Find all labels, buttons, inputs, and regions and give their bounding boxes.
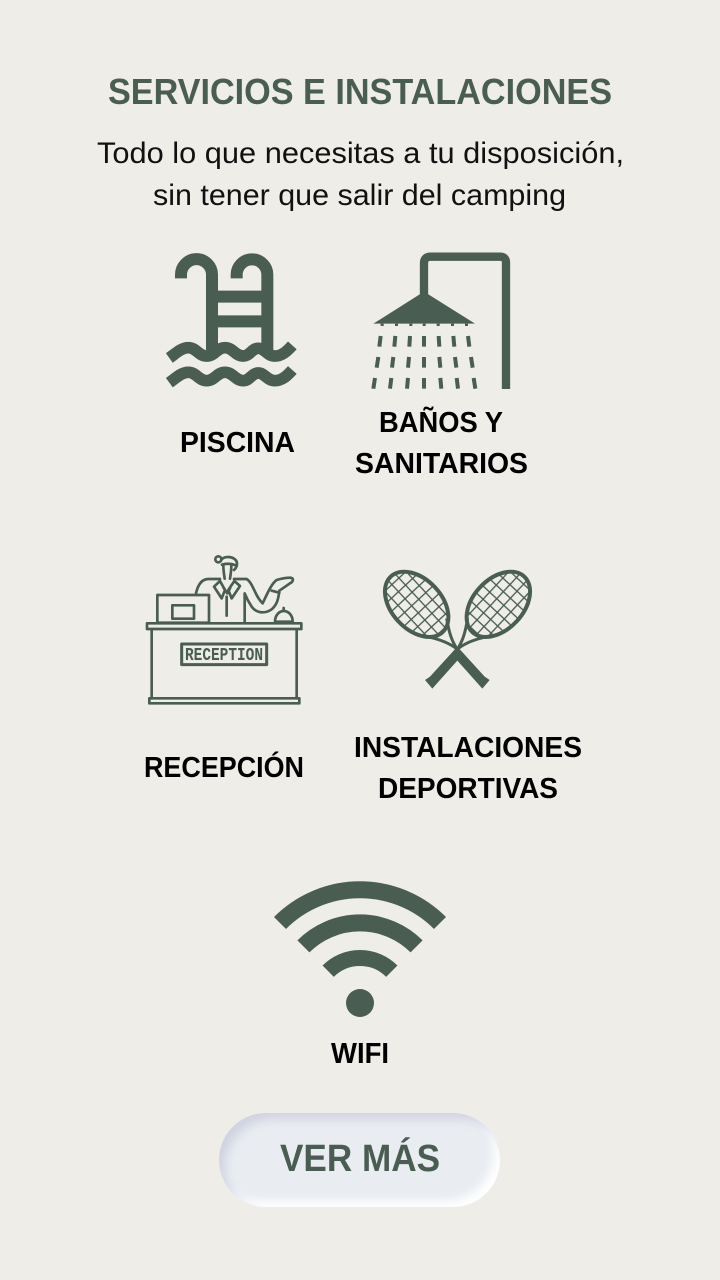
button: ver más xyxy=(219,1113,500,1207)
icon: swimming pool ladder xyxy=(169,259,292,383)
label: instalaciones deportivas xyxy=(354,732,582,805)
icon: crossed tennis rackets xyxy=(372,559,543,689)
label: wifi: WIFI xyxy=(331,1038,389,1070)
label: baños y sanitarios: SANITARIOS xyxy=(355,448,528,480)
subtitle: sin tener que salir del camping xyxy=(153,179,566,212)
icon: reception desk xyxy=(147,556,301,703)
label: baños y sanitarios: BAÑOS Y xyxy=(379,405,503,439)
icon: wifi xyxy=(280,890,440,1017)
label: instalaciones deportivas: INSTALACIONES xyxy=(354,732,582,764)
icon: shower xyxy=(373,257,506,389)
label: piscina: PISCINA xyxy=(180,427,295,459)
label: instalaciones deportivas: DEPORTIVAS xyxy=(378,773,558,805)
subtitle xyxy=(97,137,624,212)
button: ver más: VER MÁS xyxy=(280,1136,440,1180)
icon: reception desk: RECEPTION xyxy=(185,646,263,666)
label: recepción: RECEPCIÓN xyxy=(144,750,304,784)
subtitle: Todo lo que necesitas a tu disposición, xyxy=(97,137,624,170)
label: baños y sanitarios xyxy=(355,405,528,480)
title: SERVICIOS E INSTALACIONES xyxy=(108,71,612,112)
